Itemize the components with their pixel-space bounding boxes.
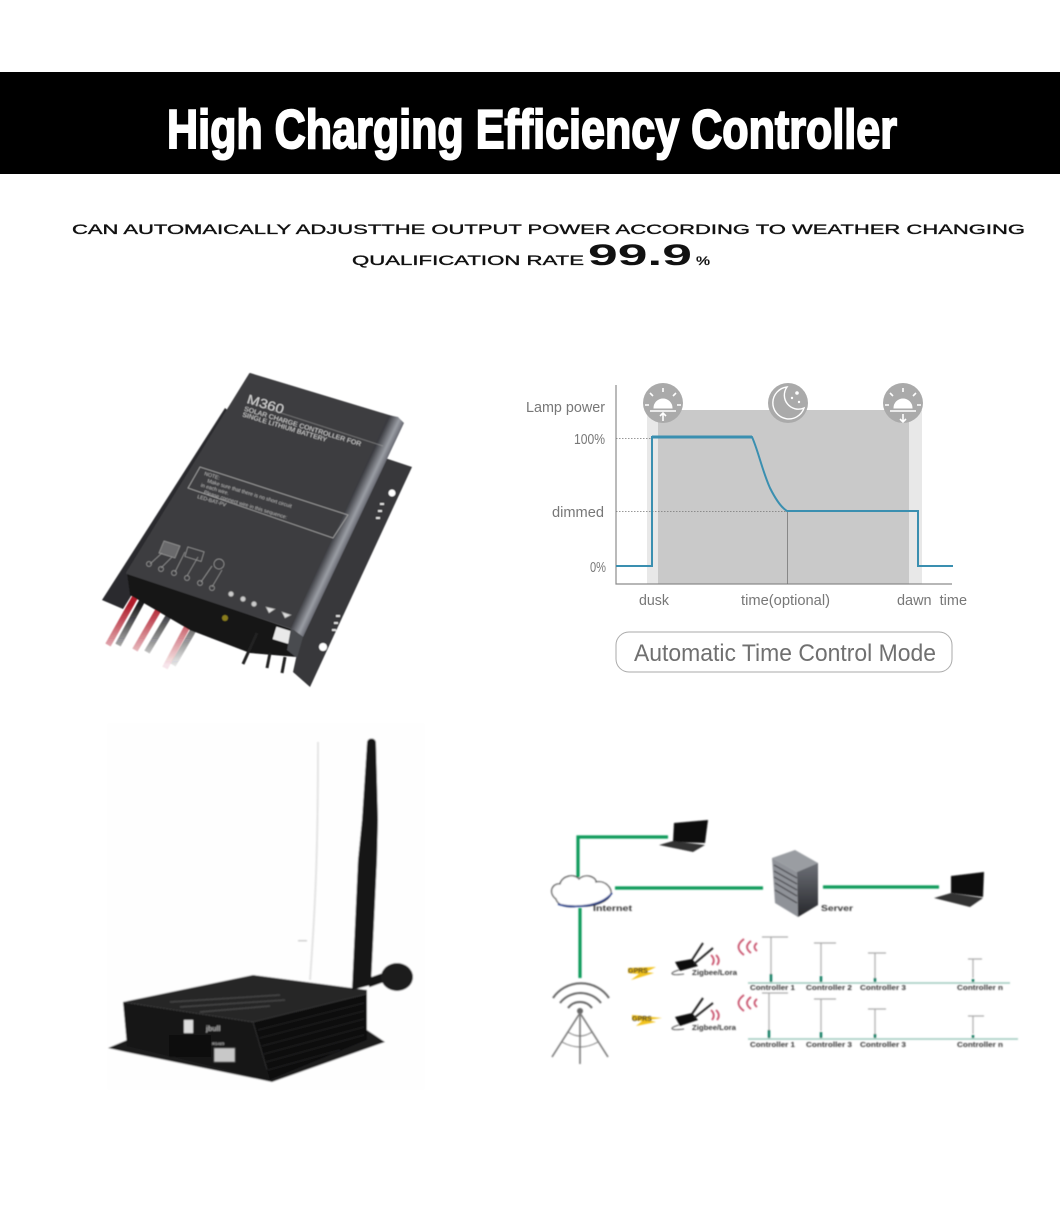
photo background [107, 723, 425, 1090]
axes [616, 385, 952, 584]
top face text: SINGLE LITHIUM BATTERY [241, 411, 328, 444]
terminal icons [146, 541, 291, 618]
dotted guides [616, 438, 788, 584]
top face [127, 374, 392, 628]
GPRS link 2 [632, 1015, 662, 1026]
street light row 2: Controller 3 [806, 1042, 852, 1049]
axis labels [526, 400, 967, 609]
street light row 1: Controller 2 [806, 985, 852, 992]
street light row 1 [748, 937, 1010, 992]
street light row 2: Controller 3 [860, 1042, 906, 1049]
note box: in each wire. [200, 483, 230, 497]
top face text [241, 391, 384, 459]
top face [123, 975, 367, 1022]
axis labels: dawn time [897, 593, 967, 609]
percent sign: % [696, 254, 710, 268]
chart: lamp power over time [526, 383, 967, 609]
night band [658, 410, 909, 584]
street light row 2: Controller 1 [750, 1042, 795, 1049]
GPRS link 1 [628, 967, 656, 980]
gateway 1 [672, 943, 738, 977]
icon: laptop 2 [934, 872, 984, 907]
subtitle line 1: CAN AUTOMAICALLY ADJUSTTHE OUTPUT POWER ACCORDING TO WEATHER CHANGING [72, 221, 1025, 237]
GPRS link 2: GPRS [632, 1016, 652, 1023]
network diagram [552, 820, 1018, 1064]
gateway 2: Zigbee/Lora [692, 1023, 737, 1032]
product photo: wireless gateway: jbull [205, 1026, 220, 1033]
note box: LED-BAT-PV [196, 494, 227, 509]
axis labels: 100% [574, 432, 605, 448]
mounting flange right [293, 458, 412, 687]
ghost antenna [310, 742, 318, 980]
wireless signals [711, 939, 757, 1020]
mode caption pill [616, 632, 952, 672]
icon: moon and stars [768, 383, 808, 423]
cables [108, 583, 205, 668]
street light row 2: Controller n [957, 1042, 1003, 1049]
server label: Server [821, 904, 853, 913]
gateway 1: Zigbee/Lora [692, 968, 738, 977]
product photo: wireless gateway: RS485 [212, 1041, 225, 1046]
qualification rate value: 99.9 [588, 239, 692, 272]
side band [291, 415, 404, 637]
internet label: Internet [593, 904, 632, 913]
antenna [352, 738, 378, 990]
axis labels: time(optional) [741, 593, 830, 609]
green network links [578, 837, 939, 978]
power curve [616, 437, 953, 566]
product photo: wireless gateway [107, 723, 425, 1090]
gateway 2 [672, 998, 737, 1032]
header rule [247, 402, 383, 446]
vent slits [258, 1003, 364, 1070]
title banner [0, 72, 1060, 174]
base flange [108, 1030, 385, 1082]
icon: sunset [643, 383, 683, 423]
icon: server rack [772, 850, 818, 917]
antenna connector [368, 977, 385, 983]
icon: sunrise [883, 383, 923, 423]
street light row 1: Controller 1 [750, 985, 795, 992]
street light row 2 [748, 993, 1018, 1049]
qualification rate label: QUALIFICATION RATE [352, 252, 584, 268]
twilight band [647, 410, 922, 584]
top face text: M360 [245, 391, 286, 417]
street light row 1: Controller 3 [860, 985, 906, 992]
note box: NOTE: [203, 471, 220, 482]
ports [184, 1020, 193, 1033]
icon: cell tower [552, 983, 609, 1064]
front end terminals [127, 573, 303, 657]
mode caption text: Automatic Time Control Mode [634, 640, 936, 667]
product photo: M360 solar charge controller [102, 374, 412, 687]
axis labels: Lamp power [526, 400, 605, 416]
axis labels: 0% [590, 560, 606, 576]
subtitle [72, 221, 1025, 272]
axis labels: dimmed [552, 505, 604, 521]
mounting flange left [102, 408, 240, 609]
note box [188, 467, 348, 538]
axis labels: dusk [639, 593, 670, 609]
note box: Please connect wire in this sequence: [203, 490, 288, 521]
street light row 1: Controller n [957, 985, 1003, 992]
GPRS link 1: GPRS [628, 968, 648, 975]
icon: internet cloud [552, 876, 611, 907]
top face text: SOLAR CHARGE CONTROLLER FOR [243, 406, 362, 448]
icon: laptop 1 [659, 820, 708, 852]
front face [123, 1002, 270, 1080]
note box: Make sure that there is no short circuit [206, 478, 293, 510]
